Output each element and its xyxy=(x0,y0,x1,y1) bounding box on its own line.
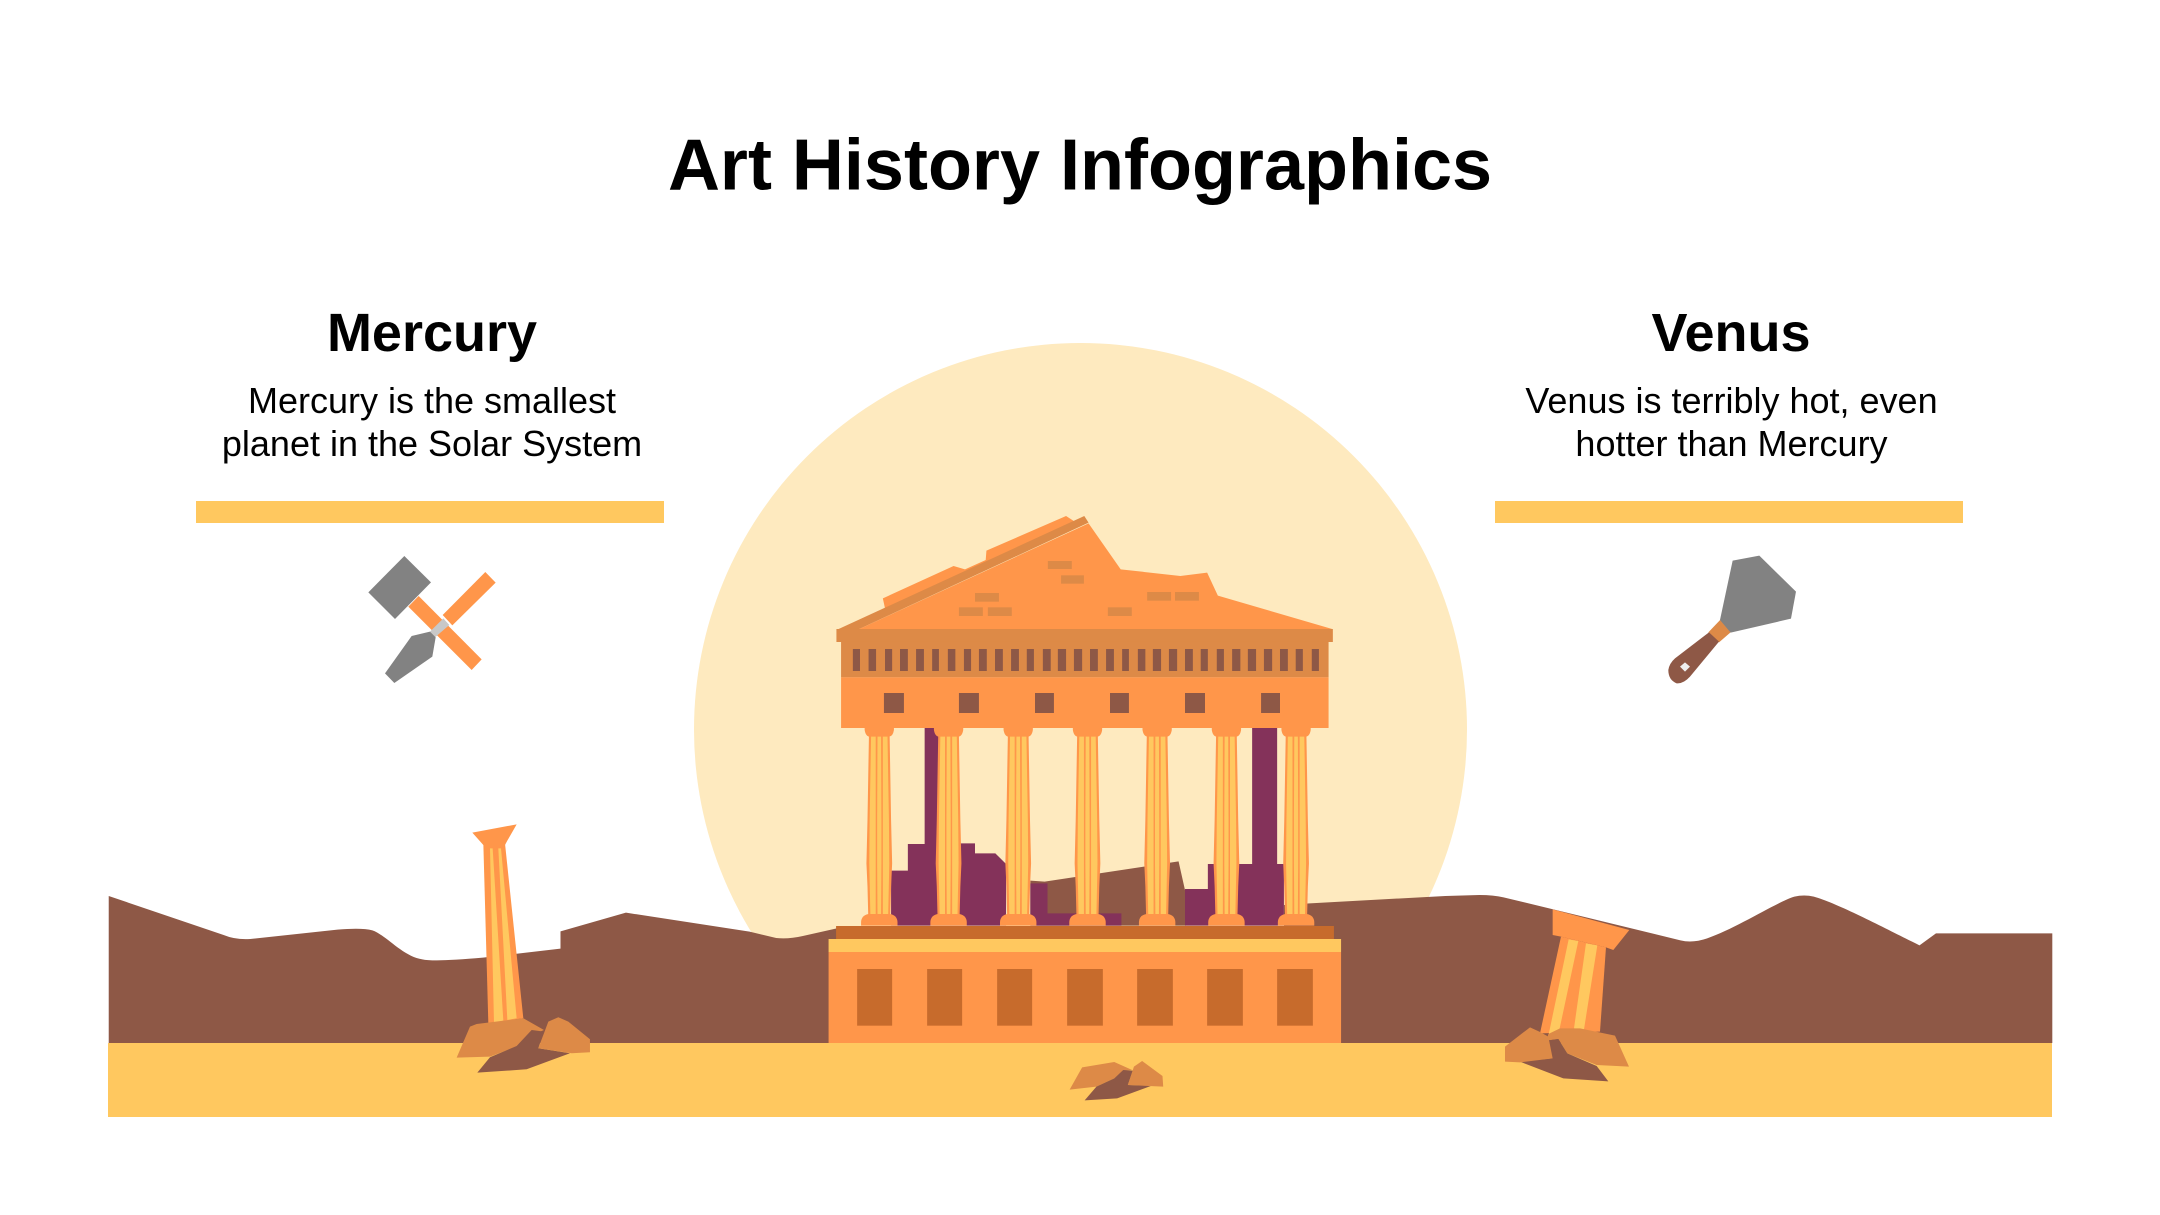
rocks: left column xyxy=(457,1017,590,1073)
text block: Mercury description: planet in the Solar System xyxy=(222,423,642,464)
temple xyxy=(829,516,1341,1043)
distant ruins behind the temple xyxy=(891,728,1284,926)
heading: Venus: Venus xyxy=(1651,303,1811,363)
hills: left xyxy=(109,896,876,1043)
hills: right xyxy=(1284,895,2052,1043)
heading: Mercury: Mercury xyxy=(327,303,537,363)
temple columns xyxy=(861,728,1314,926)
temple pediment and entablature xyxy=(836,516,1333,728)
rocks: right column xyxy=(1505,1027,1629,1081)
icon: palette knife xyxy=(1668,556,1796,683)
text block: Mercury description: Mercury is the smallest xyxy=(248,380,616,421)
text block: Venus description: hotter than Mercury xyxy=(1575,423,1888,464)
bar: Mercury divider xyxy=(196,501,664,523)
broken column: right xyxy=(1505,909,1629,1081)
ground xyxy=(108,1043,2052,1117)
text block: Venus description: Venus is terribly hot, even xyxy=(1525,380,1938,421)
title: Art History Infographics xyxy=(668,126,1492,206)
broken column: left xyxy=(457,824,590,1073)
panel: Venus xyxy=(1495,303,1963,683)
icon: hammer and trowel xyxy=(368,556,496,683)
temple base xyxy=(829,926,1341,1043)
panel: Mercury xyxy=(196,303,664,683)
rocks: centre foreground xyxy=(1070,1061,1163,1100)
sun circle xyxy=(694,343,1467,1116)
bar: Venus divider xyxy=(1495,501,1963,523)
